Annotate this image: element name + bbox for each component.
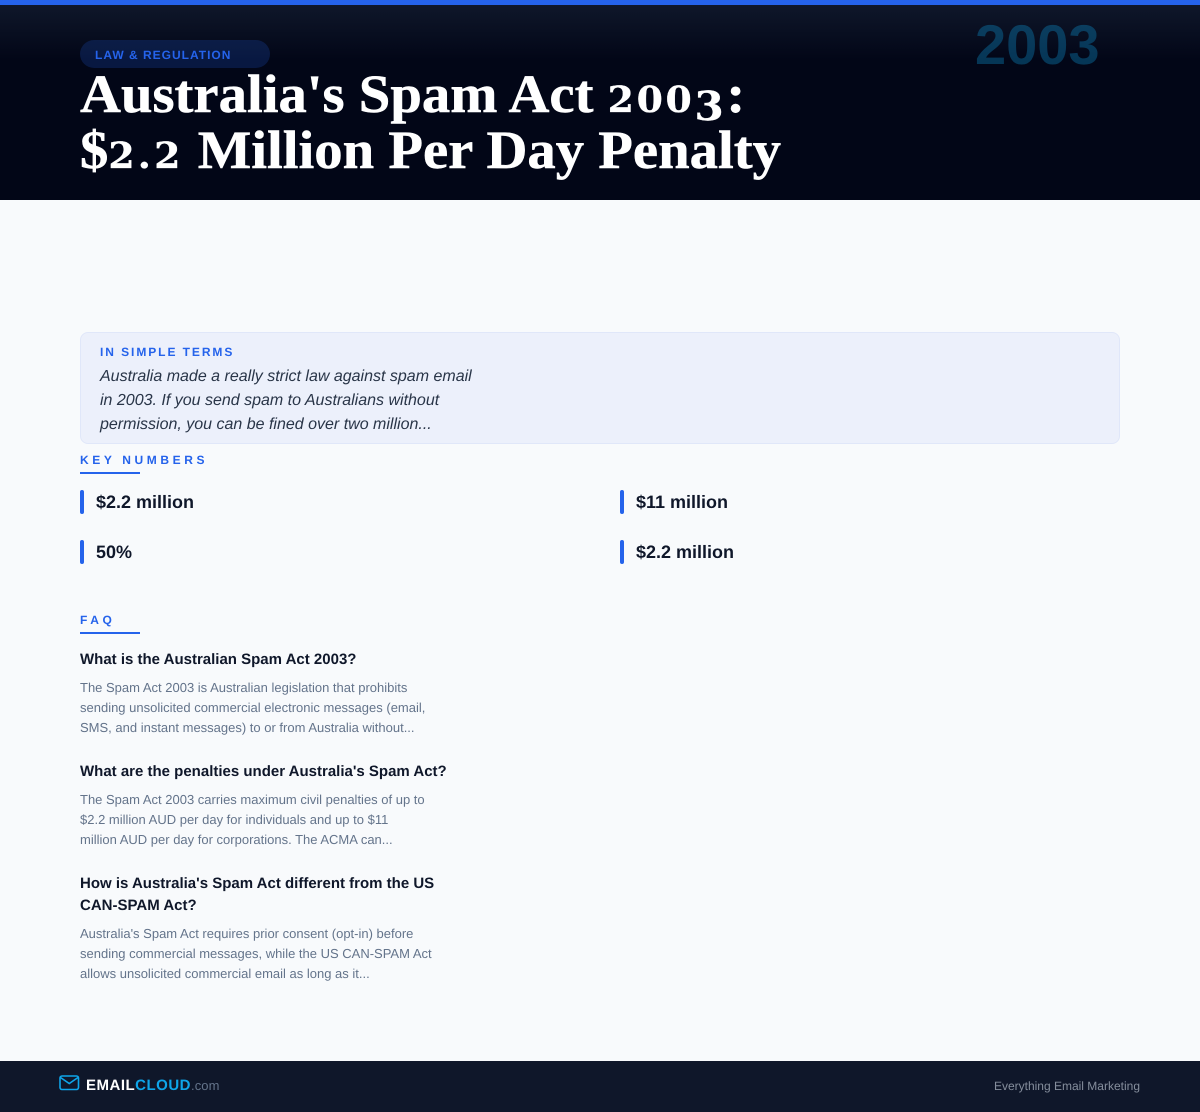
answer 2: [80, 792, 425, 847]
key numbers heading: KEY NUMBERS: [80, 453, 208, 467]
logo wordmark: EMAILCLOUD.com: [86, 1077, 220, 1094]
stat: $2.2 million: $2.2 million: [96, 492, 194, 512]
answer 1: sending unsolicited commercial electronic messages (email,: [80, 700, 425, 715]
answer 1: [80, 680, 425, 735]
answer 3: Australia's Spam Act requires prior consent (opt-in) before: [80, 926, 413, 941]
question 3: CAN-SPAM Act?: [80, 897, 197, 914]
panel label: IN SIMPLE TERMS: [100, 345, 234, 359]
panel text: permission, you can be fined over two million...: [100, 416, 432, 433]
answer 3: sending commercial messages, while the US CAN-SPAM Act: [80, 946, 432, 961]
category badge: [80, 40, 270, 68]
title: [80, 64, 781, 180]
stat: 50%: [80, 540, 132, 564]
year watermark: 2003: [975, 13, 1100, 76]
answer 2: $2.2 million AUD per day for individuals and up to $11: [80, 812, 388, 827]
question 3: [80, 875, 434, 914]
answer 1: The Spam Act 2003 is Australian legislation that prohibits: [80, 680, 407, 695]
title: Australia's Spam Act 2003:: [80, 64, 745, 130]
stat: 50%: 50%: [96, 542, 132, 562]
answer 3: [80, 926, 432, 981]
panel: in simple terms: [80, 332, 1120, 444]
answer 2: The Spam Act 2003 carries maximum civil penalties of up to: [80, 792, 425, 807]
header band: [0, 0, 1200, 200]
question 1: What is the Australian Spam Act 2003?: [80, 651, 356, 668]
icon: envelope: [59, 1075, 80, 1090]
answer 3: allows unsolicited commercial email as long as it...: [80, 966, 370, 981]
stat: $2.2 million second: $2.2 million: [636, 542, 734, 562]
question 2: What are the penalties under Australia's Spam Act?: [80, 763, 447, 780]
FAQ heading: FAQ: [80, 613, 115, 627]
section: key numbers: [80, 453, 734, 564]
category badge: LAW & REGULATION: [95, 48, 231, 62]
section: FAQ: [80, 613, 447, 981]
panel text: [99, 368, 472, 433]
footer tagline: Everything Email Marketing: [994, 1079, 1140, 1093]
title: $2.2 Million Per Day Penalty: [80, 120, 781, 180]
panel text: in 2003. If you send spam to Australians without: [100, 392, 439, 409]
question 3: How is Australia's Spam Act different from the US: [80, 875, 434, 892]
panel text: Australia made a really strict law against spam email: [100, 368, 472, 385]
stat: $11 million: $11 million: [636, 492, 728, 512]
answer 2: million AUD per day for corporations. The ACMA can...: [80, 832, 393, 847]
footer: [0, 1061, 1200, 1112]
accent bar: [0, 0, 1200, 5]
answer 1: SMS, and instant messages) to or from Australia without...: [80, 720, 415, 735]
